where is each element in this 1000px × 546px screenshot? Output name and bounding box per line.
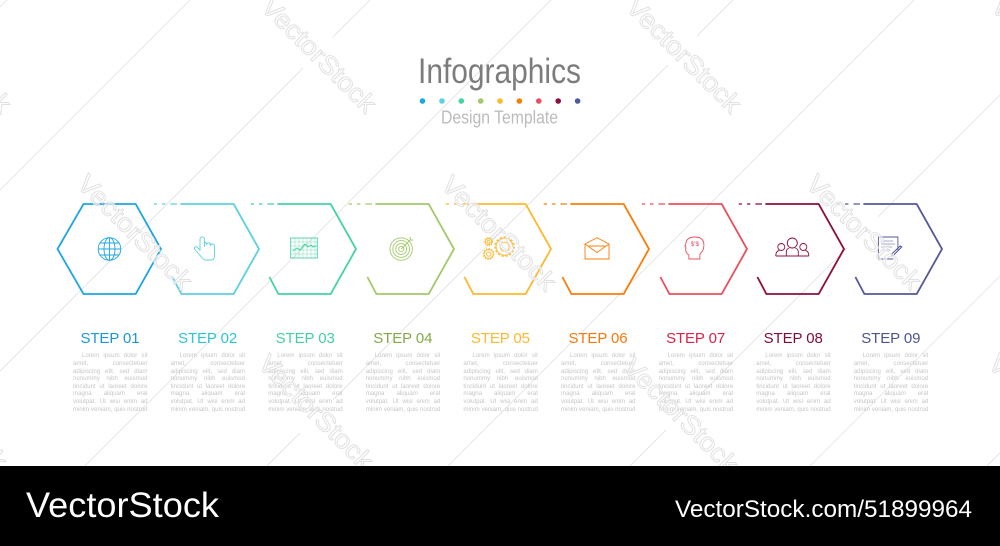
watermarks: VectorStock bbox=[252, 348, 380, 476]
panel: step 08 bbox=[738, 203, 845, 413]
text block: adipiscing elit, sed diam bbox=[854, 368, 928, 374]
text block: magna aliquam erat bbox=[659, 390, 733, 397]
text block: magna aliquam erat bbox=[366, 390, 440, 397]
text block: adipiscing elit, sed diam bbox=[756, 368, 831, 374]
text block: adipiscing elit, sed diam bbox=[366, 368, 440, 374]
text block: tincidunt ut laoreet dolore bbox=[659, 383, 733, 390]
icon: gears bbox=[484, 237, 515, 259]
text block: amet, consectetuer bbox=[854, 360, 928, 367]
text block bbox=[658, 352, 733, 413]
text block: adipiscing elit, sed diam bbox=[73, 368, 148, 374]
text block: volutpat. Ut wisi enim ad bbox=[463, 398, 538, 405]
text block: tincidunt ut laoreet dolore bbox=[171, 383, 245, 390]
text block: volutpat. Ut wisi enim ad bbox=[268, 398, 343, 405]
hexagon outline bbox=[251, 204, 356, 294]
panel: step 05 bbox=[446, 203, 552, 413]
text block: Lorem ipsum dolor sit bbox=[82, 352, 148, 359]
text block: nonummy nibh euismod bbox=[366, 375, 440, 382]
heading: STEP 06 bbox=[568, 330, 628, 347]
heading: STEP 05 bbox=[471, 330, 530, 347]
text block: volutpat. Ut wisi enim ad bbox=[659, 398, 733, 405]
text block: volutpat. Ut wisi enim ad bbox=[73, 398, 148, 405]
hexagon outline bbox=[739, 204, 844, 294]
text block: nonummy nibh euismod bbox=[854, 375, 928, 382]
text block: magna aliquam erat bbox=[463, 390, 538, 397]
icon: globe bbox=[98, 238, 121, 260]
text block: minim veniam, quis nostrud bbox=[561, 406, 636, 413]
text block: Lorem ipsum dolor sit bbox=[863, 352, 928, 359]
icon: pointing hand bbox=[194, 237, 214, 260]
text block: minim veniam, quis nostrud bbox=[268, 406, 343, 413]
panel: step 07 bbox=[642, 203, 748, 413]
text block: magna aliquam erat bbox=[171, 390, 245, 397]
text block bbox=[756, 352, 831, 413]
text block bbox=[366, 352, 440, 413]
text block: amet, consectetuer bbox=[366, 360, 440, 367]
text block: amet, consectetuer bbox=[268, 360, 343, 367]
text block: Lorem ipsum dolor sit bbox=[765, 352, 831, 359]
title: Infographics bbox=[418, 52, 581, 91]
text block: nonummy nibh euismod bbox=[171, 375, 245, 382]
text block: minim veniam, quis nostrud bbox=[756, 406, 831, 413]
text block: adipiscing elit, sed diam bbox=[659, 368, 733, 374]
icon: document with pencil bbox=[878, 237, 901, 259]
watermarks: VectorStock bbox=[71, 168, 199, 296]
text block: volutpat. Ut wisi enim ad bbox=[366, 398, 440, 405]
text block: amet, consectetuer bbox=[756, 360, 831, 367]
text block: magna aliquam erat bbox=[854, 390, 928, 397]
hexagon outline bbox=[544, 204, 649, 294]
text block: amet, consectetuer bbox=[463, 360, 538, 367]
text block: adipiscing elit, sed diam bbox=[463, 368, 538, 374]
text block: amet, consectetuer bbox=[171, 360, 245, 367]
text block: Lorem ipsum dolor sit bbox=[570, 352, 636, 359]
heading: STEP 01 bbox=[80, 330, 140, 347]
hexagon outline bbox=[348, 204, 454, 294]
text block: tincidunt ut laoreet dolore bbox=[73, 383, 148, 390]
text block: minim veniam, quis nostrud bbox=[854, 406, 928, 413]
text block: magna aliquam erat bbox=[73, 390, 148, 397]
heading: STEP 02 bbox=[178, 330, 237, 347]
text block: minim veniam, quis nostrud bbox=[659, 406, 733, 413]
watermarks: VectorStock bbox=[435, 169, 563, 297]
text block: nonummy nibh euismod bbox=[73, 375, 148, 382]
icon: group of people bbox=[776, 238, 809, 256]
text block: nonummy nibh euismod bbox=[268, 375, 343, 382]
text block: volutpat. Ut wisi enim ad bbox=[854, 398, 928, 405]
text block bbox=[463, 352, 538, 413]
text block: magna aliquam erat bbox=[756, 390, 831, 397]
text block: volutpat. Ut wisi enim ad bbox=[756, 398, 831, 405]
text block: magna aliquam erat bbox=[561, 390, 636, 397]
text block: tincidunt ut laoreet dolore bbox=[561, 383, 636, 390]
text block: tincidunt ut laoreet dolore bbox=[756, 383, 831, 390]
watermarks: VectorStock bbox=[800, 168, 928, 296]
panel: step 09 bbox=[836, 203, 943, 413]
heading: STEP 09 bbox=[861, 330, 920, 347]
panel: step 04 bbox=[348, 203, 455, 413]
hexagon outline bbox=[836, 204, 942, 294]
text block bbox=[561, 352, 636, 413]
text block: Lorem ipsum dolor sit bbox=[668, 352, 733, 359]
subtitle: Design Template bbox=[441, 108, 558, 128]
hexagon outline bbox=[58, 204, 161, 294]
heading: STEP 08 bbox=[764, 330, 823, 347]
text block bbox=[73, 352, 148, 413]
watermarks: VectorStock bbox=[617, 351, 745, 479]
text block: nonummy nibh euismod bbox=[756, 375, 831, 382]
text block: adipiscing elit, sed diam bbox=[171, 368, 245, 374]
footer brand: VectorStock bbox=[26, 486, 220, 525]
text block: amet, consectetuer bbox=[73, 360, 148, 367]
text block bbox=[268, 352, 343, 413]
heading: STEP 04 bbox=[373, 330, 432, 347]
icon: target with arrow bbox=[390, 237, 413, 260]
text block bbox=[854, 352, 928, 413]
text block: Lorem ipsum dolor sit bbox=[472, 352, 538, 359]
footer image id: VectorStock.com/51899964 bbox=[675, 496, 972, 523]
text block: nonummy nibh euismod bbox=[659, 375, 733, 382]
icon: head with money: $'$ bbox=[690, 241, 699, 248]
text block: nonummy nibh euismod bbox=[561, 375, 636, 382]
panel: step 03 bbox=[250, 203, 357, 413]
heading: STEP 03 bbox=[276, 330, 335, 347]
hexagon outline bbox=[641, 204, 747, 294]
panel: step 06 bbox=[544, 203, 650, 413]
icon: envelope bbox=[585, 238, 609, 259]
text block: adipiscing elit, sed diam bbox=[561, 368, 636, 374]
panel: step 01 bbox=[56, 203, 162, 413]
text block: Lorem ipsum dolor sit bbox=[180, 352, 245, 359]
text block: volutpat. Ut wisi enim ad bbox=[561, 398, 636, 405]
text block: minim veniam, quis nostrud bbox=[463, 406, 538, 413]
text block: Lorem ipsum dolor sit bbox=[277, 352, 343, 359]
footer bar bbox=[0, 466, 1000, 546]
text block: tincidunt ut laoreet dolore bbox=[463, 383, 538, 390]
text block: nonummy nibh euismod bbox=[463, 375, 538, 382]
hexagon outline bbox=[153, 204, 259, 294]
text block: tincidunt ut laoreet dolore bbox=[854, 383, 928, 390]
text block: minim veniam, quis nostrud bbox=[171, 406, 245, 413]
text block: adipiscing elit, sed diam bbox=[268, 368, 343, 374]
colour dots row bbox=[420, 98, 580, 104]
panel: step 02 bbox=[154, 203, 260, 413]
text block: magna aliquam erat bbox=[268, 390, 343, 397]
icon: line chart bbox=[291, 238, 317, 258]
hexagon outline bbox=[446, 204, 551, 294]
text block: minim veniam, quis nostrud bbox=[73, 406, 148, 413]
text block: tincidunt ut laoreet dolore bbox=[366, 383, 440, 390]
text block: Lorem ipsum dolor sit bbox=[375, 352, 440, 359]
text block bbox=[170, 352, 245, 413]
text block: minim veniam, quis nostrud bbox=[366, 406, 440, 413]
text block: volutpat. Ut wisi enim ad bbox=[171, 398, 245, 405]
text block: amet, consectetuer bbox=[561, 360, 636, 367]
text block: amet, consectetuer bbox=[659, 360, 733, 367]
text block: tincidunt ut laoreet dolore bbox=[268, 383, 343, 390]
heading: STEP 07 bbox=[666, 330, 725, 347]
